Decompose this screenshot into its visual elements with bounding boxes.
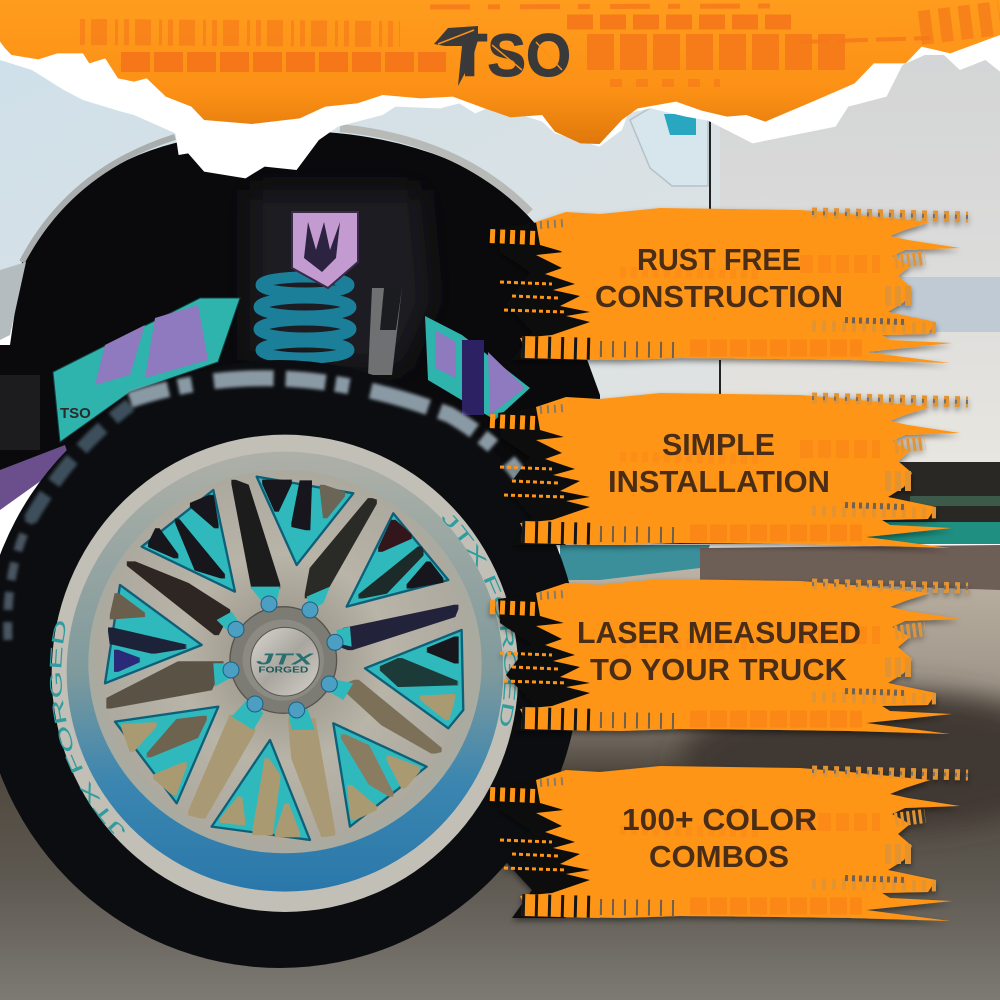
- callout text: RUST FREE: [637, 242, 801, 277]
- truck right door panel: [705, 0, 1000, 465]
- logo inner scratches: [438, 30, 562, 70]
- logo tail: [434, 26, 478, 86]
- truck fender panel: [0, 40, 720, 400]
- brush banner: [490, 579, 968, 734]
- teal panels: [105, 477, 463, 840]
- rim in zoom coordinates: [52, 435, 518, 912]
- rim lettering right: [440, 518, 504, 730]
- light blue reflection: [880, 277, 1000, 332]
- blue shading: [88, 473, 482, 853]
- ground: [0, 560, 1000, 1000]
- callout text: INSTALLATION: [608, 464, 830, 499]
- fender vent badge: [630, 108, 708, 186]
- lower rocker dark area: [560, 462, 1000, 544]
- brush banner: [490, 208, 968, 363]
- brush banner: [490, 393, 968, 548]
- hub ring: [230, 607, 337, 713]
- lug nuts: [223, 596, 343, 718]
- open slits: [108, 482, 457, 835]
- white torn strip: [0, 0, 1000, 178]
- well interior shading: [250, 190, 430, 370]
- panel windows sand: [123, 696, 453, 835]
- tire: [0, 360, 580, 968]
- callout text: CONSTRUCTION: [595, 279, 843, 314]
- rim lettering left: [61, 619, 127, 831]
- right inner plate: [425, 316, 530, 420]
- coil spring: [259, 277, 351, 358]
- callout: rust free construction: [490, 208, 968, 363]
- logo: TSO: [434, 22, 571, 89]
- dark mud patch: [680, 690, 1000, 830]
- orange torn header: [0, 0, 1000, 144]
- wheel and tire: JTX FORGED: [50, 621, 125, 834]
- callout text: TO YOUR TRUCK: [590, 652, 848, 687]
- callout text: SIMPLE: [662, 427, 775, 462]
- rim lip: [52, 435, 518, 912]
- callout text: COMBOS: [649, 839, 789, 874]
- callout text: 100+ COLOR: [622, 802, 817, 837]
- rim in zoom coordinates: FORGED: [258, 666, 309, 675]
- wheel well: [0, 131, 600, 470]
- wheel and tire: [0, 360, 573, 968]
- under truck debris: [560, 545, 710, 580]
- wheel and tire: JTX FORGED: [442, 515, 516, 726]
- brush banner: [490, 766, 968, 921]
- callout: laser measured: [490, 579, 968, 734]
- callout: color combos: [490, 766, 968, 921]
- arch trim: [22, 137, 175, 262]
- door seam: [710, 110, 720, 395]
- panel windows dark: [110, 482, 457, 685]
- left inner plate: [53, 298, 240, 442]
- purple bracket: [292, 212, 358, 288]
- logo letters: TSO: [452, 22, 571, 89]
- frame dark: [0, 375, 40, 450]
- teal badge: [664, 114, 696, 135]
- purple strut: [0, 445, 70, 510]
- cap logo: JTX: [256, 651, 314, 668]
- callout text: LASER MEASURED: [577, 615, 861, 650]
- tso mark on plate: TSO: [60, 405, 91, 422]
- rim face: [95, 470, 472, 847]
- center cap: [243, 619, 324, 701]
- left bumper: [0, 262, 26, 340]
- shock absorber: [368, 288, 402, 375]
- torn paper header: [0, 0, 1000, 178]
- rim barrel: [67, 452, 503, 892]
- header tire track texture: [80, 6, 1000, 83]
- callout: simple installation: [490, 393, 968, 548]
- teal hub connectors: [213, 587, 353, 730]
- tire tread highlight: [8, 378, 535, 640]
